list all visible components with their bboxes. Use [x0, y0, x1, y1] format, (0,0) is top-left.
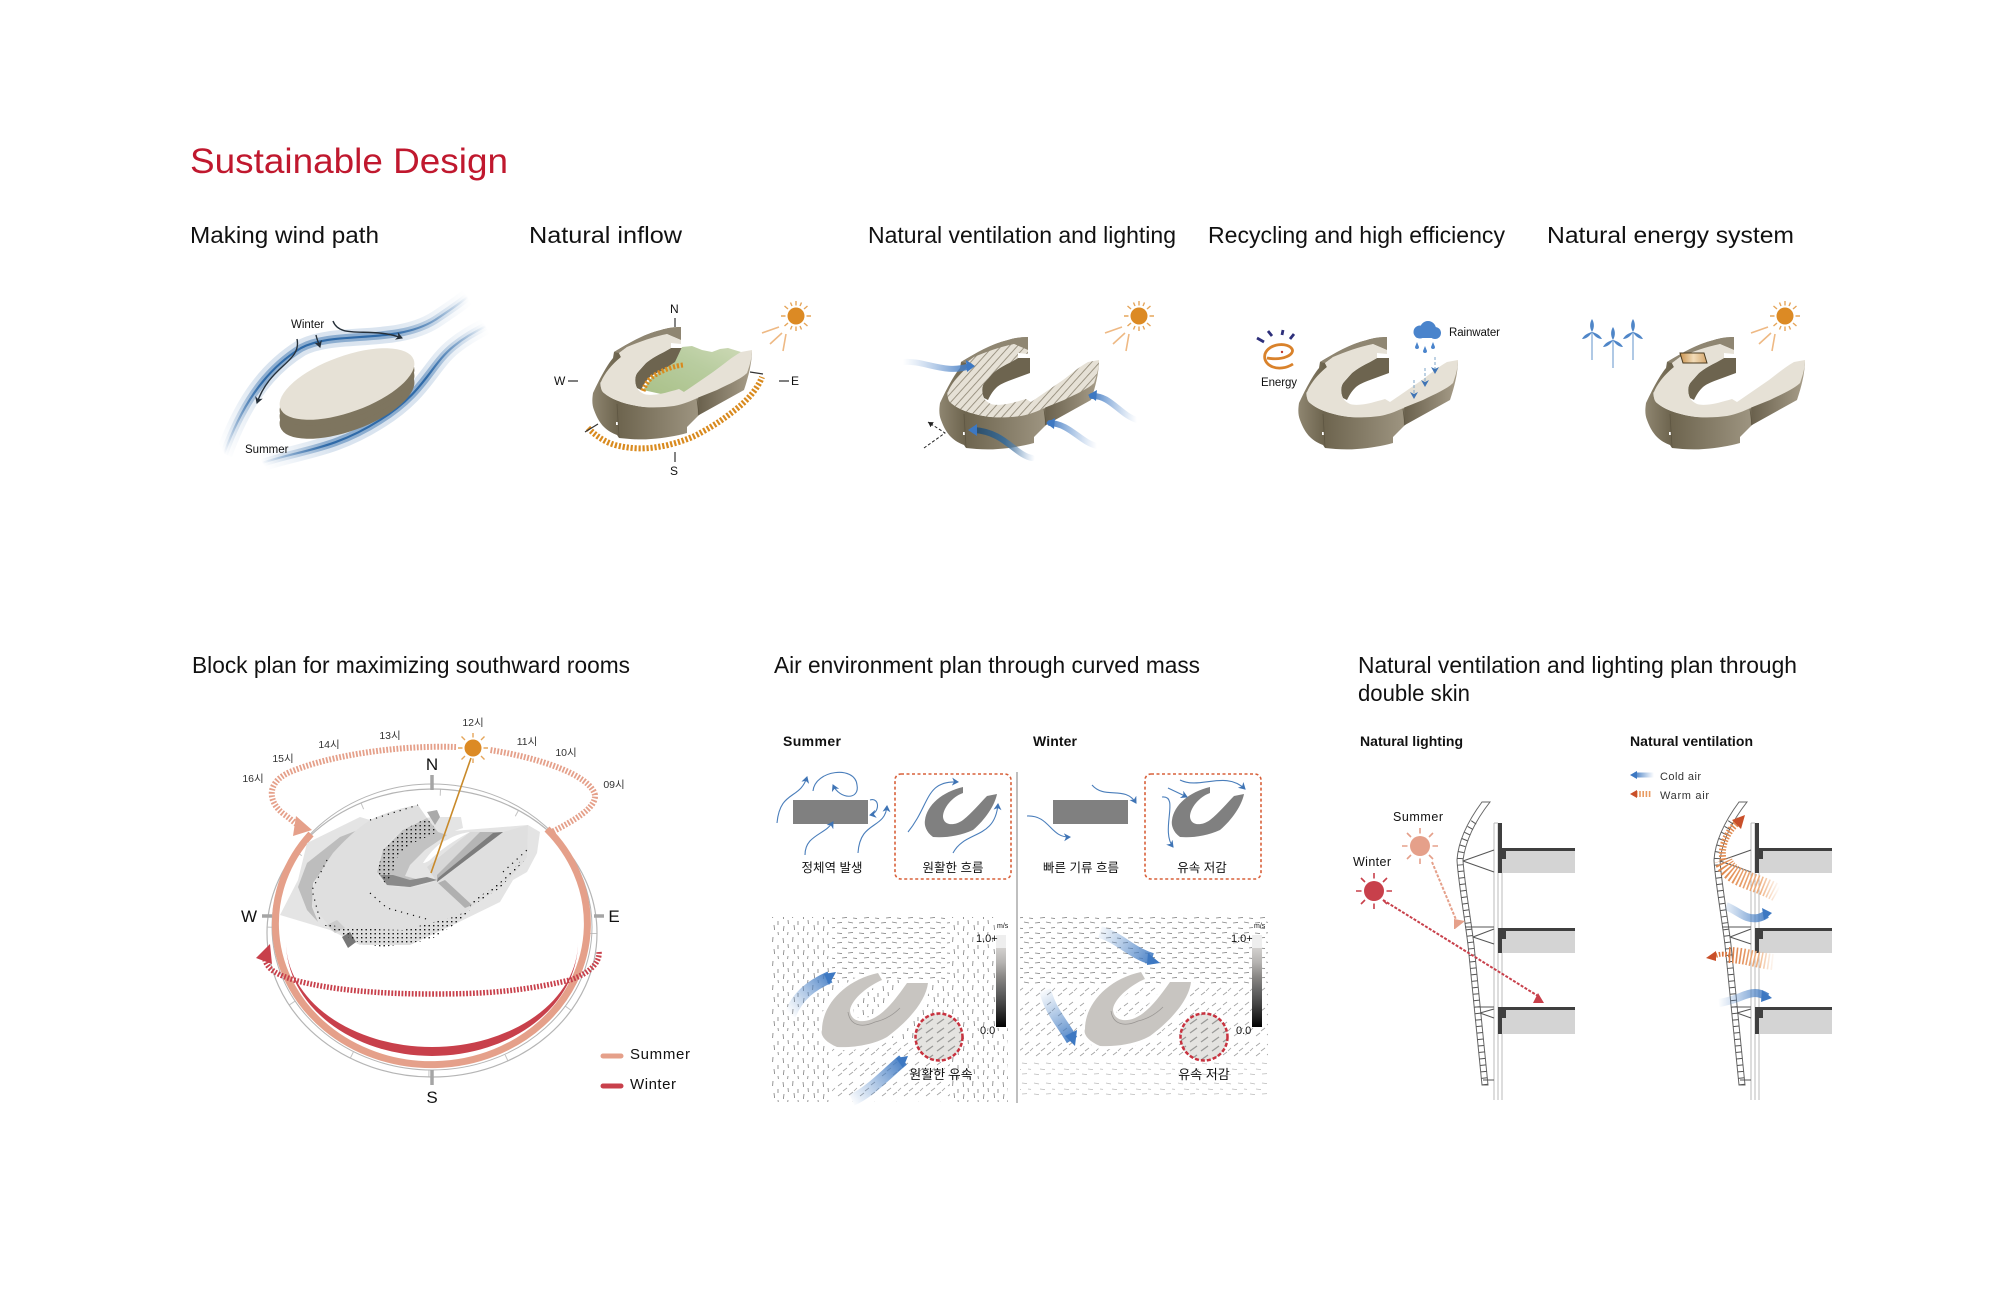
colour bar winter: 0.0: [1236, 1025, 1251, 1037]
icon: rain cloud: [1414, 321, 1441, 353]
colour bar summer: [976, 923, 1009, 1037]
compass ticks: [568, 318, 789, 462]
section: natural lighting facade: [1457, 802, 1575, 1100]
curved mass winter: [1172, 787, 1244, 837]
divider: [1016, 772, 1018, 1103]
panel: recycling and high efficiency: [1208, 222, 1505, 449]
building roof: [601, 334, 752, 407]
flow arrows: [777, 772, 1245, 855]
main title: Sustainable Design: [190, 142, 508, 181]
label: natural ventilation: Natural ventilation: [1630, 733, 1753, 749]
label: winter: Winter: [291, 319, 324, 331]
heading: double skin, line two: double skin: [1358, 680, 1470, 706]
hour labels: 16시: [242, 773, 264, 785]
panel: block plan: [192, 652, 690, 1107]
warm air upper arrow: [1722, 815, 1777, 893]
heading: block plan: Block plan for maximizing southward rooms: [192, 652, 630, 678]
summer block mass: [793, 800, 868, 824]
winter block mass: [1053, 800, 1128, 824]
cross-ventilation dashed arrows: [924, 422, 945, 448]
hour labels: [242, 717, 625, 791]
icon: sun: [1105, 301, 1154, 351]
panel: natural ventilation and lighting: [868, 222, 1176, 458]
label: winter: Winter: [1353, 855, 1391, 869]
hatched roof: [948, 344, 1099, 417]
panel: double skin: [1353, 652, 1832, 1100]
compass labels: E: [791, 374, 799, 388]
label: summer: Summer: [1393, 810, 1443, 824]
icon: energy mark: [1257, 330, 1294, 368]
wind stream upper: [224, 295, 470, 454]
summer sun arc: [275, 829, 587, 1065]
label: rainwater: Rainwater: [1449, 327, 1500, 339]
compass labels: E: [608, 907, 620, 926]
wide blue wind arrows: [790, 932, 1160, 1100]
compass labels: S: [426, 1088, 438, 1107]
winter sun path dotted: [265, 952, 599, 994]
legend: Winter: [630, 1076, 676, 1093]
heading: making wind path: Making wind path: [190, 222, 379, 248]
label: natural lighting: Natural lighting: [1360, 733, 1463, 749]
compass labels: W: [241, 907, 257, 926]
heading: air environment plan: Air environment plan through curved mass: [774, 652, 1200, 678]
summer light ray: [1432, 862, 1465, 929]
building massing: [1298, 337, 1458, 449]
legend: cold air: [1630, 771, 1701, 783]
panel: natural energy system: [1547, 222, 1805, 449]
building roof: [1654, 344, 1805, 417]
label: winter: Winter: [1033, 733, 1078, 749]
heading: natural ventilation and lighting: Natural ventilation and lighting: [868, 222, 1176, 248]
icon: sun: [458, 733, 488, 763]
highlighted box summer: [895, 774, 1011, 879]
hour labels: 10시: [555, 747, 577, 759]
panel: natural inflow: [529, 222, 811, 478]
compass labels: [554, 302, 799, 478]
compass labels: N: [670, 302, 679, 316]
warm air lower arrow: [1706, 951, 1773, 962]
slow zone circle summer: [916, 1014, 962, 1060]
colour bar winter: [1231, 923, 1266, 1037]
label: energy: Energy: [1261, 377, 1297, 389]
airflow arrowheads: [966, 360, 1097, 436]
label: summer: Summer: [245, 444, 289, 456]
rainwater dashed arrows: [1414, 357, 1435, 398]
hour labels: 11시: [517, 736, 537, 748]
cold air upper arrow: [1726, 906, 1772, 920]
flow labels: 유속 저감: [1177, 861, 1227, 875]
sun to site ray: [431, 758, 471, 873]
compass labels: N: [426, 755, 438, 774]
building massing: [592, 327, 752, 439]
panel: making wind path: [190, 222, 486, 463]
label: summer: Summer: [783, 733, 842, 749]
legend: Summer: [630, 1046, 690, 1063]
heading: double skin, line one: Natural ventilation and lighting plan through: [1358, 652, 1797, 678]
building shadow study: [280, 805, 540, 948]
slow zone circle winter: [1180, 1014, 1228, 1060]
hour labels: 09시: [603, 779, 625, 791]
colour bar summer: 1.0+: [976, 933, 998, 945]
colour bar winter: m/s: [1254, 923, 1266, 930]
winter light ray: [1383, 900, 1544, 1003]
field label summer: 원활한 유속: [909, 1067, 973, 1082]
solar panel: [1680, 353, 1707, 363]
compass labels: [241, 755, 620, 1107]
summer sun path dotted: [272, 747, 595, 833]
field label winter: 유속 저감: [1178, 1067, 1230, 1082]
elliptical massing: [271, 333, 423, 454]
winter sun arc: [286, 942, 578, 1056]
building massing: [939, 337, 1099, 449]
building roof: [1307, 344, 1458, 417]
icon: wind turbines: [1582, 319, 1643, 368]
legend: [603, 1046, 690, 1093]
panel: air environment plan: [770, 652, 1268, 1103]
hour labels: 13시: [379, 730, 401, 742]
compass labels: W: [554, 374, 566, 388]
icon: sun: [762, 301, 811, 351]
wind stream lower: [262, 326, 486, 463]
legend: cold air: Cold air: [1660, 771, 1701, 783]
building massing: [1645, 337, 1805, 449]
compass labels: S: [670, 464, 678, 478]
section: natural ventilation facade: [1714, 802, 1832, 1100]
icon: sun: [1751, 301, 1800, 351]
hour labels: 15시: [272, 753, 294, 765]
compass ring: [262, 775, 604, 1085]
cold air lower arrow: [1719, 990, 1772, 1003]
winter arrowhead: [256, 944, 272, 964]
summer arrowhead: [293, 816, 312, 836]
icon: winter sun: [1356, 873, 1392, 909]
vector field winter: [1020, 917, 1268, 1102]
highlighted box winter: [1145, 774, 1261, 879]
airflow arrows: [903, 362, 1137, 458]
legend: warm air: [1630, 790, 1709, 802]
colour bar summer: m/s: [997, 923, 1009, 930]
colour bar winter: 1.0+: [1231, 933, 1253, 945]
flow labels: 원활한 흐름: [923, 861, 983, 875]
hour labels: 12시: [462, 717, 484, 729]
heading: natural inflow: Natural inflow: [529, 222, 682, 248]
heading: recycling and high efficiency: Recycling and high efficiency: [1208, 222, 1505, 248]
heading: natural energy system: Natural energy system: [1547, 222, 1794, 248]
colour bar summer: 0.0: [980, 1025, 995, 1037]
hour labels: 14시: [318, 739, 340, 751]
flow labels: 빠른 기류 흐름: [1043, 861, 1119, 875]
flow labels: [802, 861, 1227, 875]
curved mass summer: [925, 787, 997, 837]
courtyard greenery: [643, 346, 741, 396]
legend: warm air: Warm air: [1660, 790, 1709, 802]
icon: summer sun: [1402, 828, 1438, 864]
sun path arcs: [588, 365, 762, 448]
winter wind arrows: [257, 321, 402, 403]
flow labels: 정체역 발생: [802, 861, 862, 875]
vector field summer: [770, 917, 1008, 1102]
